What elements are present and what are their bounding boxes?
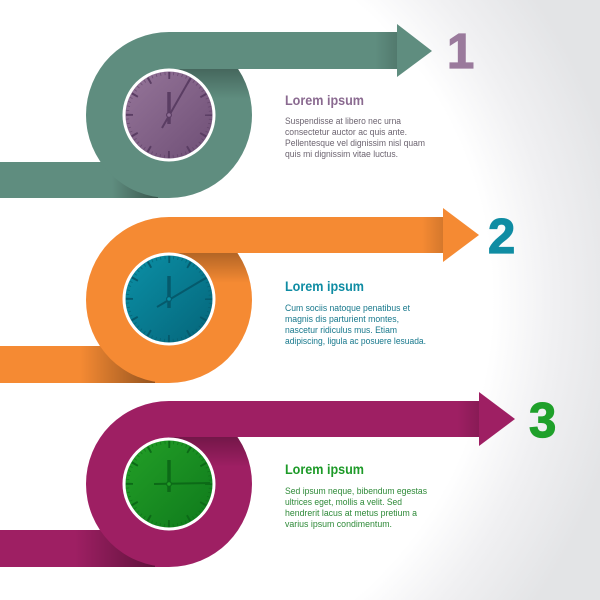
body 3: hendrerit lacus at metus pretium a bbox=[285, 508, 418, 519]
body 3: varius ipsum condimentum. bbox=[285, 519, 392, 530]
heading 3: Lorem ipsum bbox=[285, 461, 364, 477]
body 1: Suspendisse at libero nec urna bbox=[285, 116, 402, 127]
body 2 bbox=[285, 303, 426, 347]
body 2: magnis dis parturient montes, bbox=[285, 314, 399, 325]
body 2: adipiscing, ligula ac posuere lesuada. bbox=[285, 336, 426, 347]
text block 2 bbox=[285, 278, 426, 347]
body 3 bbox=[285, 486, 427, 530]
text block 3 bbox=[285, 461, 427, 530]
body 2: nascetur ridiculus mus. Etiam bbox=[285, 325, 397, 336]
clock 3 bbox=[122, 438, 216, 530]
number 1: 1 bbox=[447, 25, 474, 79]
body 2: Cum sociis natoque penatibus et bbox=[285, 303, 410, 314]
body 1: quis mi dignissim vitae luctus. bbox=[285, 149, 398, 160]
body 3: ultrices eget, mollis a velit. Sed bbox=[285, 497, 402, 508]
text block 1 bbox=[285, 92, 425, 160]
number 3: 3 bbox=[529, 394, 556, 448]
clock 1 bbox=[122, 68, 216, 162]
panel: step 2 bbox=[0, 208, 515, 383]
body 1: consectetur auctor ac quis ante. bbox=[285, 127, 407, 138]
panel: step 3 bbox=[0, 392, 556, 567]
ribbon arrow 2 bbox=[0, 208, 479, 383]
ribbon arrow 3 bbox=[0, 392, 515, 567]
body 1 bbox=[285, 116, 425, 160]
ribbon arrow 1 bbox=[0, 24, 432, 198]
number 2: 2 bbox=[488, 210, 515, 264]
heading 1: Lorem ipsum bbox=[285, 92, 364, 108]
panel: step 1 bbox=[0, 24, 474, 198]
clock 2 bbox=[122, 252, 216, 346]
body 1: Pellentesque vel dignissim nisl quam bbox=[285, 138, 425, 149]
heading 2: Lorem ipsum bbox=[285, 278, 364, 294]
body 3: Sed ipsum neque, bibendum egestas bbox=[285, 486, 427, 497]
